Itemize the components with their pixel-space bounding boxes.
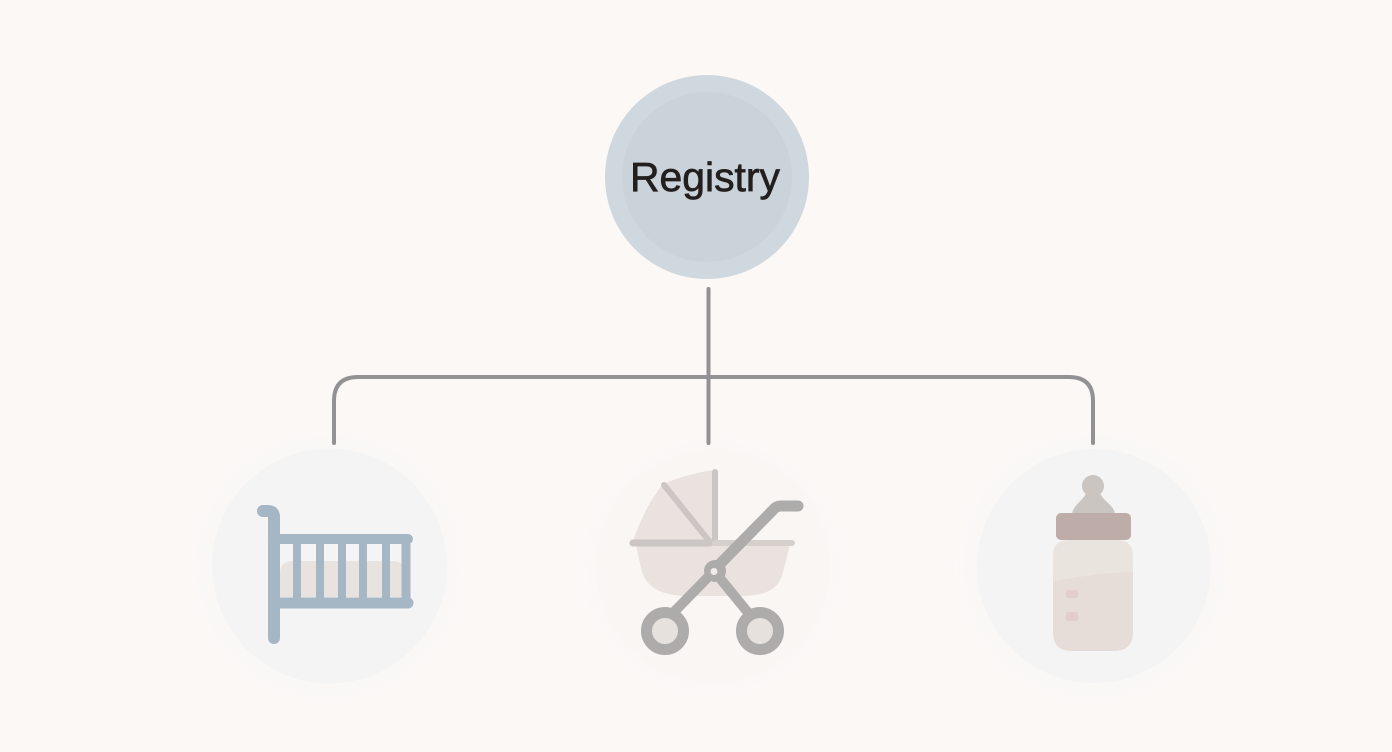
panel: crib <box>212 448 447 684</box>
heading: Registry: Registry <box>630 154 780 200</box>
icon: stroller <box>633 470 798 650</box>
icon: crib <box>263 511 408 638</box>
icon: bottle <box>1053 475 1133 651</box>
connector: tree lines <box>334 289 1093 443</box>
panel: bottle <box>977 449 1211 683</box>
node: Registry <box>605 75 809 279</box>
panel: stroller <box>596 449 830 683</box>
